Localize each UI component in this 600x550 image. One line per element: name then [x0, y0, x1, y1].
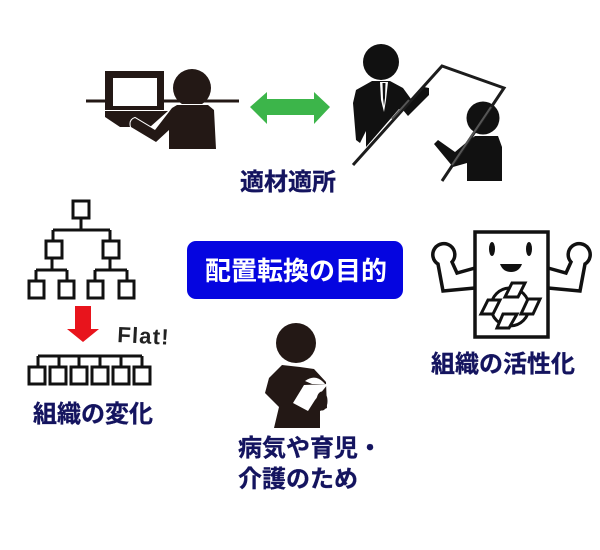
- label: org change: 組織の変化: [33, 401, 153, 428]
- icon: hierarchical org chart: [29, 201, 134, 298]
- icon: flat org chart: [29, 356, 150, 384]
- icon: person at laptop: [86, 69, 239, 149]
- label: org activation: 組織の活性化: [431, 351, 575, 378]
- central title badge: [187, 241, 403, 299]
- icon: red down arrow: [67, 306, 99, 342]
- central title badge: 配置転換の目的: [205, 256, 387, 286]
- icon: presenter and listener with board: [353, 44, 504, 181]
- icon: green double arrow: [250, 92, 330, 124]
- label: right placement: 適材適所: [240, 169, 336, 196]
- label: Flat!: Flat!: [117, 322, 170, 350]
- label: nursing care: 介護のため: [238, 466, 358, 493]
- icon: smiling organisation character: [433, 232, 590, 337]
- label: illness or childcare: 病気や育児・: [238, 435, 382, 462]
- icon: person holding document: [265, 323, 328, 428]
